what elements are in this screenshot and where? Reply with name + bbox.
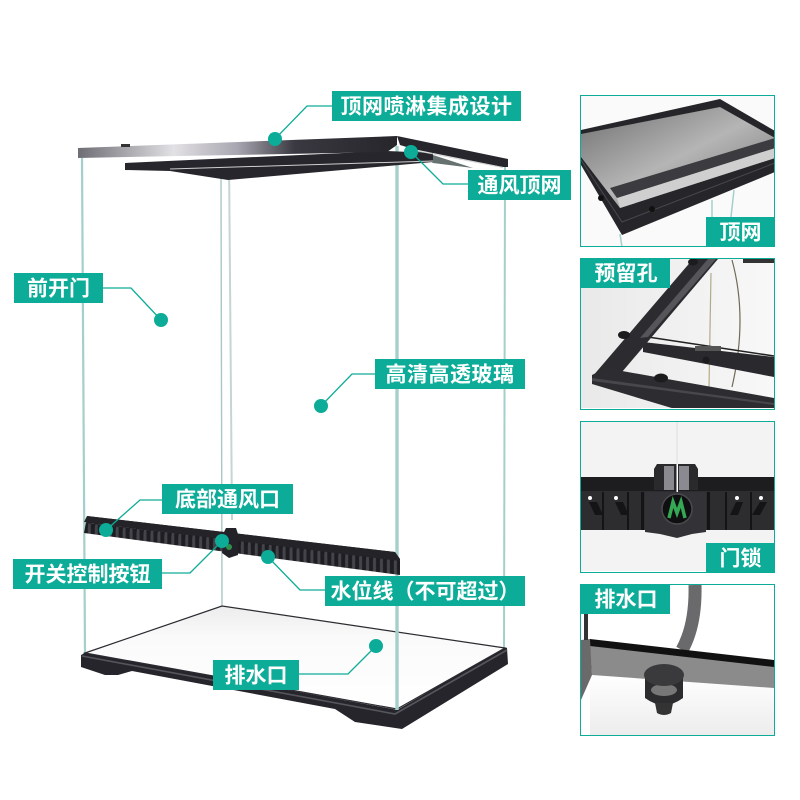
glass floor (85, 606, 505, 709)
label: 门锁: 门锁 (720, 548, 762, 570)
front right glass edge (395, 146, 399, 710)
callout: 开关控制按钮 (13, 534, 229, 589)
callout: 顶网喷淋集成设计 (268, 91, 521, 146)
label: 预留孔 (580, 258, 670, 288)
callout: 排水口: 排水口 (224, 664, 288, 688)
callout: 前开门 (14, 273, 168, 327)
back glass edges (82, 158, 505, 654)
base tray (81, 606, 508, 729)
callout: 高清高透玻璃: 高清高透玻璃 (386, 362, 514, 386)
panel: 门锁 (580, 421, 775, 573)
panel: 预留孔 (580, 258, 775, 410)
label: 排水口 (580, 584, 670, 614)
top lid (78, 136, 508, 180)
label: 顶网: 顶网 (720, 222, 762, 244)
callout: 底部通风口: 底部通风口 (175, 488, 280, 512)
callout: 通风顶网: 通风顶网 (478, 174, 562, 198)
label: 门锁 (706, 543, 775, 573)
label: 顶网 (706, 217, 775, 247)
callout: 水位线（不可超过）: 水位线（不可超过） (330, 580, 520, 604)
main product: glass terrarium (78, 136, 508, 729)
callout: 排水口 (213, 639, 383, 690)
infographic canvas (13, 91, 775, 736)
bottom vent strip (84, 516, 400, 575)
callout: 水位线（不可超过） (261, 550, 525, 606)
callout: 开关控制按钮: 开关控制按钮 (24, 564, 150, 586)
callout: 前开门: 前开门 (27, 278, 90, 300)
panel: 排水口 (580, 584, 775, 737)
callout: 底部通风口 (99, 484, 293, 537)
callout: 通风顶网 (404, 145, 571, 200)
callout: 顶网喷淋集成设计: 顶网喷淋集成设计 (340, 94, 512, 118)
label: 排水口: 排水口 (594, 588, 658, 612)
label: 预留孔: 预留孔 (594, 262, 658, 286)
callout: 高清高透玻璃 (314, 359, 525, 413)
panel: 顶网 (580, 95, 775, 247)
